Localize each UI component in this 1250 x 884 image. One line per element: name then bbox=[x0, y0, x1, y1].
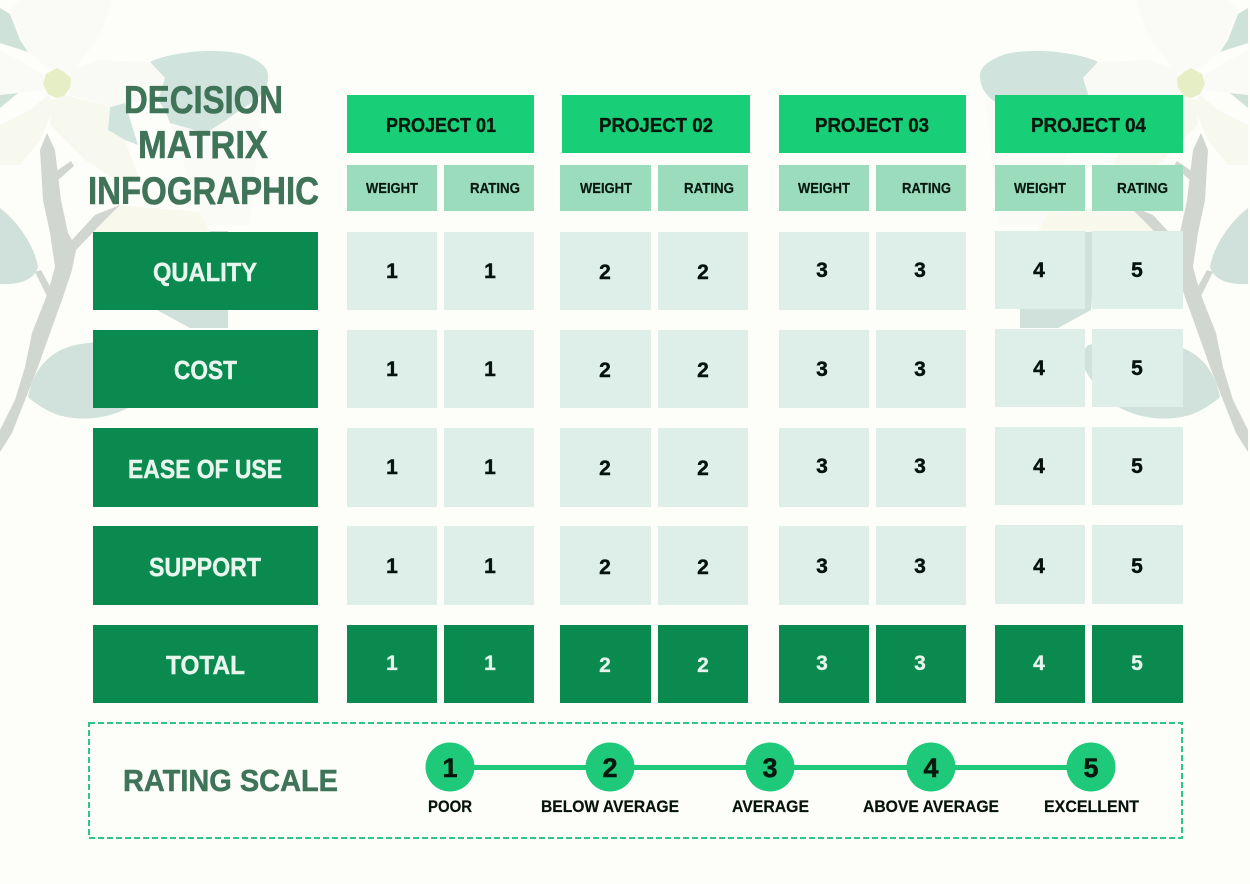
project 02 column bbox=[560, 95, 750, 703]
scale step 4: above average bbox=[863, 742, 999, 816]
project 04 cost cells: 5 bbox=[1131, 357, 1143, 380]
project 04 rating header: RATING bbox=[1117, 180, 1168, 197]
row labels bbox=[93, 232, 318, 703]
scale step 4: above average: ABOVE AVERAGE bbox=[863, 797, 999, 816]
scale step 1: poor bbox=[426, 742, 474, 816]
project 01 ease of use cells: 1 bbox=[484, 456, 496, 479]
project 01 total cells: 1 bbox=[386, 652, 398, 675]
project 02 cost cells: 2 bbox=[599, 359, 611, 382]
project 03 weight header bbox=[779, 165, 869, 211]
project 04 weight header bbox=[995, 165, 1085, 211]
project 02 header bbox=[562, 95, 750, 153]
scale connector line bbox=[450, 765, 1091, 770]
project 04 cost cells: 4 bbox=[1033, 357, 1045, 380]
title: DECISION bbox=[124, 79, 283, 122]
project 03 cost cells bbox=[779, 330, 966, 408]
project 04 column bbox=[995, 95, 1183, 703]
project 02 total cells: 2 bbox=[599, 654, 611, 677]
project 03 rating header bbox=[876, 165, 966, 211]
project 03 total cells bbox=[779, 625, 966, 703]
project 03 quality cells: 3 bbox=[816, 259, 828, 282]
project 01 rating header: RATING bbox=[470, 180, 520, 197]
project 01 ease of use cells: 1 bbox=[386, 456, 398, 479]
project 02 total cells: 2 bbox=[697, 654, 709, 677]
project 02 total cells bbox=[560, 625, 748, 703]
project 03 support cells: 3 bbox=[816, 555, 828, 578]
project 01 support cells: 1 bbox=[386, 555, 398, 578]
scale step 2: below average bbox=[541, 742, 679, 816]
project 01 column bbox=[347, 95, 534, 703]
title: MATRIX bbox=[138, 124, 268, 167]
project 04 support cells: 4 bbox=[1033, 555, 1045, 578]
project 01 quality cells: 1 bbox=[484, 260, 496, 283]
project 01 quality cells bbox=[347, 232, 534, 310]
title: INFOGRAPHIC bbox=[88, 170, 319, 213]
project 01 quality cells: 1 bbox=[386, 260, 398, 283]
row label: ease of use: EASE OF USE bbox=[128, 454, 282, 484]
project 02 cost cells: 2 bbox=[697, 359, 709, 382]
project 01 ease of use cells bbox=[347, 428, 534, 507]
project 02 rating header: RATING bbox=[684, 180, 734, 197]
project 04 total cells bbox=[995, 625, 1183, 703]
project 04 cost cells bbox=[995, 329, 1183, 407]
title bbox=[88, 79, 319, 213]
project 02 support cells bbox=[560, 526, 748, 605]
project 01 total cells: 1 bbox=[484, 652, 496, 675]
scale step 1: poor: 1 bbox=[442, 753, 458, 783]
row label: quality: QUALITY bbox=[153, 257, 257, 287]
project 04 rating header bbox=[1092, 165, 1183, 211]
project 04 support cells bbox=[995, 525, 1183, 604]
scale step 1: poor: POOR bbox=[428, 797, 472, 816]
project 02 header: PROJECT 02 bbox=[599, 115, 713, 137]
project 03 weight header: WEIGHT bbox=[798, 180, 850, 197]
project 02 ease of use cells: 2 bbox=[599, 457, 611, 480]
project 04 header: PROJECT 04 bbox=[1031, 115, 1147, 137]
row label: cost bbox=[93, 330, 318, 408]
project 03 total cells: 3 bbox=[914, 652, 926, 675]
project 01 header: PROJECT 01 bbox=[386, 115, 496, 137]
project 02 weight header bbox=[560, 165, 651, 211]
project 04 ease of use cells bbox=[995, 427, 1183, 505]
project 01 cost cells: 1 bbox=[386, 358, 398, 381]
scale step 3: average: AVERAGE bbox=[732, 797, 809, 816]
project 02 quality cells bbox=[560, 232, 748, 310]
project 03 total cells: 3 bbox=[816, 652, 828, 675]
project 03 quality cells bbox=[779, 232, 966, 310]
project 04 support cells: 5 bbox=[1131, 555, 1143, 578]
project 02 support cells: 2 bbox=[599, 556, 611, 579]
project 01 header bbox=[347, 95, 534, 153]
row label: total bbox=[93, 625, 318, 703]
row label: support: SUPPORT bbox=[149, 552, 261, 582]
project 01 cost cells: 1 bbox=[484, 358, 496, 381]
project 01 cost cells bbox=[347, 330, 534, 408]
project 02 ease of use cells: 2 bbox=[697, 457, 709, 480]
project 01 weight header: WEIGHT bbox=[366, 180, 418, 197]
project 04 ease of use cells: 4 bbox=[1033, 455, 1045, 478]
row label: total: TOTAL bbox=[166, 650, 245, 680]
project 02 quality cells: 2 bbox=[599, 261, 611, 284]
project 03 support cells bbox=[779, 526, 966, 605]
scale step 5: excellent: EXCELLENT bbox=[1044, 797, 1140, 816]
project 04 total cells: 5 bbox=[1131, 652, 1143, 675]
row label: quality bbox=[93, 232, 318, 310]
scale step 5: excellent bbox=[1044, 742, 1140, 816]
project 03 ease of use cells: 3 bbox=[914, 455, 926, 478]
project 04 total cells: 4 bbox=[1033, 652, 1045, 675]
project 03 ease of use cells bbox=[779, 428, 966, 507]
scale step 2: below average: 2 bbox=[602, 753, 618, 783]
project 02 cost cells bbox=[560, 330, 748, 408]
project 01 support cells bbox=[347, 526, 534, 605]
scale step 3: average: 3 bbox=[762, 753, 778, 783]
project 04 quality cells: 5 bbox=[1131, 259, 1143, 282]
decoration: right flower branch bbox=[980, 0, 1248, 452]
project 01 weight header bbox=[347, 165, 437, 211]
project 03 header bbox=[779, 95, 966, 153]
project 02 quality cells: 2 bbox=[697, 261, 709, 284]
project 03 quality cells: 3 bbox=[914, 259, 926, 282]
project 02 weight header: WEIGHT bbox=[580, 180, 632, 197]
project 02 ease of use cells bbox=[560, 428, 748, 507]
project 04 ease of use cells: 5 bbox=[1131, 455, 1143, 478]
project 03 cost cells: 3 bbox=[816, 358, 828, 381]
project 01 support cells: 1 bbox=[484, 555, 496, 578]
project 03 cost cells: 3 bbox=[914, 358, 926, 381]
decoration: left flower branch bbox=[0, 0, 268, 452]
project 03 header: PROJECT 03 bbox=[815, 115, 929, 137]
scale step 3: average bbox=[732, 742, 809, 816]
row label: ease of use bbox=[93, 428, 318, 507]
project 04 quality cells bbox=[995, 231, 1183, 309]
rating scale heading: RATING SCALE bbox=[123, 763, 338, 798]
project 01 rating header bbox=[444, 165, 534, 211]
project 03 column bbox=[779, 95, 966, 703]
project 04 header bbox=[995, 95, 1183, 153]
row label: support bbox=[93, 526, 318, 605]
project 02 support cells: 2 bbox=[697, 556, 709, 579]
row label: cost: COST bbox=[174, 355, 237, 385]
panel: rating scale bbox=[89, 723, 1182, 838]
project 02 rating header bbox=[658, 165, 748, 211]
project 03 ease of use cells: 3 bbox=[816, 455, 828, 478]
scale step 2: below average: BELOW AVERAGE bbox=[541, 797, 679, 816]
project 01 total cells bbox=[347, 625, 534, 703]
project 03 support cells: 3 bbox=[914, 555, 926, 578]
project 03 rating header: RATING bbox=[902, 180, 951, 197]
scale step 5: excellent: 5 bbox=[1083, 753, 1099, 783]
scale step 4: above average: 4 bbox=[923, 753, 939, 783]
project 04 weight header: WEIGHT bbox=[1014, 180, 1066, 197]
project 04 quality cells: 4 bbox=[1033, 259, 1045, 282]
